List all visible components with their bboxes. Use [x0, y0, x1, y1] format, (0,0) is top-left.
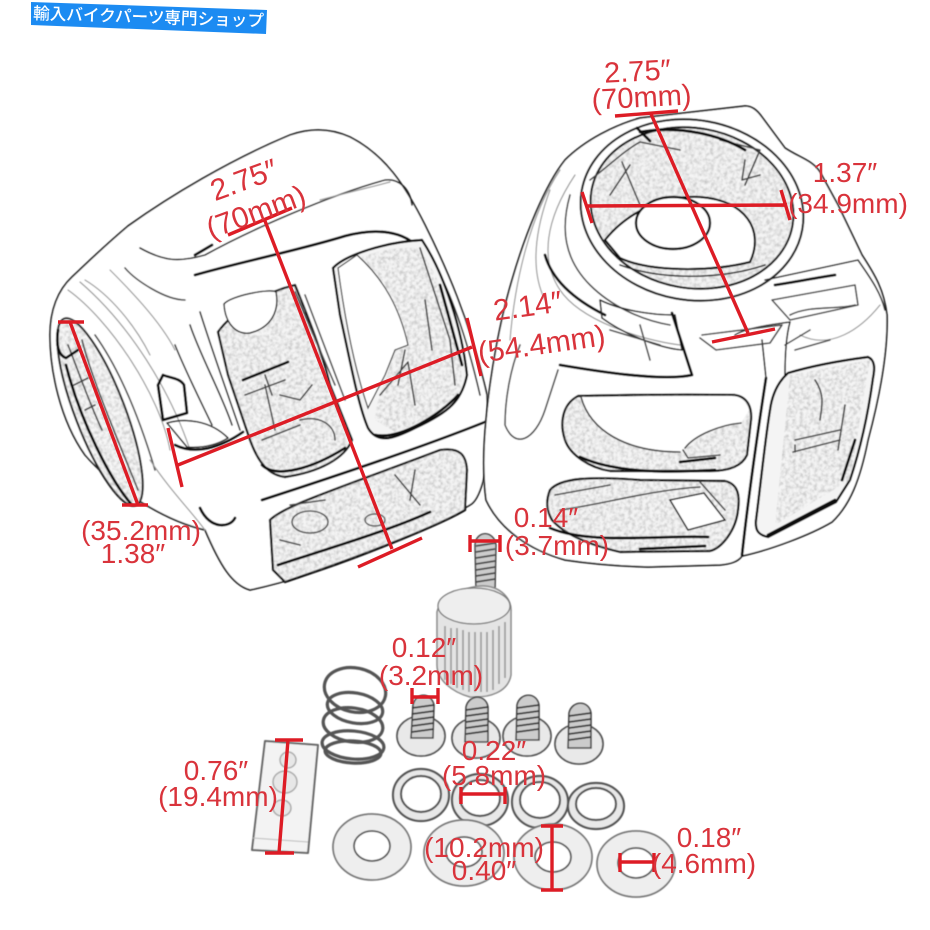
dimension: flat washer 0.18 in: (4.6mm) — [652, 848, 756, 879]
dimension: right housing 2.75 in — [591, 54, 775, 342]
top ridge lines — [68, 180, 480, 530]
right side window — [756, 357, 874, 537]
dimension: left housing 2.75 in — [202, 153, 422, 567]
flat washers — [333, 814, 675, 897]
dimension: flat washer 0.40 in: 0.40″ — [452, 855, 516, 886]
dimension: screw 0.12 in — [379, 632, 483, 704]
dimension: left housing 2.14 in: (54.4mm) — [476, 319, 608, 370]
screw 2 — [452, 697, 500, 758]
screw 4 — [555, 703, 603, 764]
thumb screw thread — [475, 534, 496, 590]
centre seam — [700, 322, 790, 555]
lock washers — [393, 769, 624, 829]
centre window — [218, 285, 352, 477]
dimension: end cap 1.38 in — [58, 322, 201, 569]
dimension: right housing 2.75 in: (70mm) — [591, 79, 692, 117]
screw 3 — [503, 695, 551, 756]
dimension: plate 0.76 in — [158, 740, 303, 853]
dimension: lock washer 0.22 in — [442, 735, 546, 804]
spring — [320, 662, 390, 764]
left small window — [158, 312, 243, 450]
divider bar — [262, 422, 485, 500]
dimension: right housing 1.37 in: 1.37″ — [813, 157, 877, 188]
dimension: lock washer 0.22 in: 0.22″ — [462, 735, 526, 766]
dimension: left housing 2.14 in — [168, 285, 608, 487]
dimension: end cap 1.38 in: (35.2mm) — [81, 515, 201, 546]
top right switch slot — [765, 260, 885, 350]
right switch housing — [484, 102, 887, 567]
side band — [200, 508, 235, 525]
dimension: plate 0.76 in: 0.76″ — [184, 755, 248, 786]
dimension: left housing 2.75 in: 2.75″ — [206, 153, 283, 208]
dimension: screw 0.14 in: 0.14″ — [514, 502, 578, 533]
retainer plate — [252, 741, 318, 853]
thumb screw — [437, 534, 511, 697]
dimension: left housing 2.14 in: 2.14″ — [491, 285, 565, 328]
dimension: screw 0.12 in: 0.12″ — [392, 632, 456, 663]
dimension: flat washer 0.18 in: 0.18″ — [677, 822, 741, 853]
dimension: screw 0.14 in — [470, 502, 609, 561]
dimension: screw 0.14 in: (3.7mm) — [505, 530, 609, 561]
lens end window — [41, 310, 159, 514]
dimension: flat washer 0.18 in — [620, 822, 756, 879]
housing body outline — [50, 130, 489, 590]
dimension: end cap 1.38 in: 1.38″ — [101, 538, 165, 569]
dimension: lock washer 0.22 in: (5.8mm) — [442, 760, 546, 791]
dimension: right housing 2.75 in: 2.75″ — [603, 54, 672, 90]
left shoulder contours — [505, 170, 692, 439]
dimension: left housing 2.75 in: (70mm) — [202, 179, 310, 246]
right window — [333, 240, 467, 438]
dimension: flat washer 0.40 in: (10.2mm) — [424, 832, 544, 863]
dimension: right housing 1.37 in: (34.9mm) — [788, 188, 908, 219]
lower window — [270, 449, 467, 582]
top ring — [566, 102, 818, 318]
screw 1 — [397, 695, 445, 756]
dimension: plate 0.76 in: (19.4mm) — [158, 781, 278, 812]
upper left window — [562, 395, 751, 472]
banner: shop name: 輸入バイクパーツ専門ショップ — [33, 4, 265, 31]
left switch housing — [41, 130, 489, 590]
dimension: screw 0.12 in: (3.2mm) — [379, 660, 483, 691]
four small screws — [397, 695, 603, 764]
housing body outline — [484, 106, 887, 567]
dimension: flat washer 0.40 in — [424, 826, 563, 890]
lower left window — [547, 478, 739, 552]
dimension: right housing 1.37 in — [582, 157, 908, 223]
thumb screw knurled head — [437, 586, 511, 697]
